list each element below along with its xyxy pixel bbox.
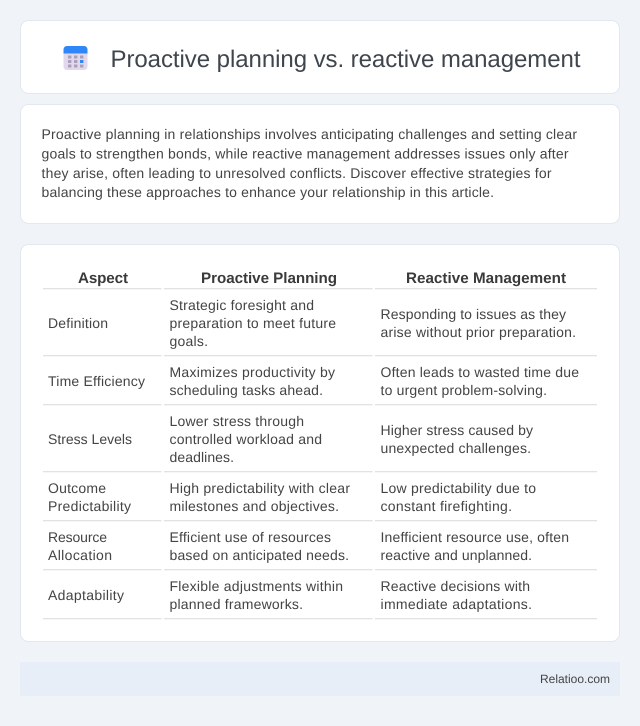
row: time efficiency: Maximizes productivity by [170,364,335,380]
row: stress levels: Stress Levels [48,431,132,447]
row: resource allocation: based on anticipated needs. [170,547,349,563]
row: outcome predictability: Low predictability due to [380,480,536,496]
row: adaptability [48,578,532,612]
row: adaptability: planned frameworks. [170,596,303,612]
footer [20,662,620,696]
row: definition: arise without prior preparation. [380,324,576,340]
row: outcome predictability: High predictability with clear [170,480,350,496]
row: definition [48,297,576,349]
row: outcome predictability: milestones and objectives. [170,498,339,514]
row: time efficiency: scheduling tasks ahead. [170,382,323,398]
title: Proactive planning vs. reactive management [110,46,581,73]
row: outcome predictability [48,480,536,514]
row: resource allocation: Resource [48,529,107,545]
row: stress levels: deadlines. [170,449,234,465]
row: resource allocation [48,529,569,563]
table header: Reactive Management [406,270,566,287]
text block: introduction: they arise, often leading to unresolved conflicts. Discover effective strategies for [42,165,552,181]
row: definition: Responding to issues as they [380,306,566,322]
row: stress levels: controlled workload and [170,431,322,447]
panel: comparison table [20,244,620,642]
icon: calendar [64,46,88,70]
row: time efficiency: to urgent problem-solving. [380,382,547,398]
footer credit: Relatioo.com [540,672,610,686]
row: stress levels: Lower stress through [170,413,304,429]
row: adaptability: immediate adaptations. [380,596,532,612]
row: adaptability: Flexible adjustments within [170,578,343,594]
row: adaptability: Reactive decisions with [380,578,530,594]
text block: introduction [42,126,577,200]
text block: introduction: balancing these approaches to enhance your relationship in this article. [42,184,494,200]
row: definition: Strategic foresight and [170,297,314,313]
text block: introduction: Proactive planning in relationships involves anticipating challenges and setting clear [42,126,577,142]
row: stress levels: unexpected challenges. [380,440,531,456]
text block: introduction: goals to strengthen bonds, while reactive management addresses issues only after [42,146,569,162]
row: resource allocation: reactive and unplanned. [380,547,532,563]
table header: Proactive Planning [201,270,337,287]
row: stress levels [48,413,533,465]
row: adaptability: Adaptability [48,587,124,603]
row: definition: Definition [48,315,108,331]
panel: title card [20,20,620,94]
panel: introduction [20,104,620,224]
row: resource allocation: Allocation [48,547,112,563]
row: definition: goals. [170,333,208,349]
row: time efficiency: Often leads to wasted time due [380,364,579,380]
row: resource allocation: Inefficient resource use, often [380,529,569,545]
row: time efficiency: Time Efficiency [48,373,145,389]
table header [78,270,566,287]
row: outcome predictability: Predictability [48,498,131,514]
table header: Aspect [78,270,128,287]
row: outcome predictability: constant firefighting. [380,498,512,514]
row: time efficiency [48,364,579,398]
row: outcome predictability: Outcome [48,480,106,496]
row: definition: preparation to meet future [170,315,336,331]
row: stress levels: Higher stress caused by [380,422,533,438]
row: resource allocation: Efficient use of resources [170,529,331,545]
